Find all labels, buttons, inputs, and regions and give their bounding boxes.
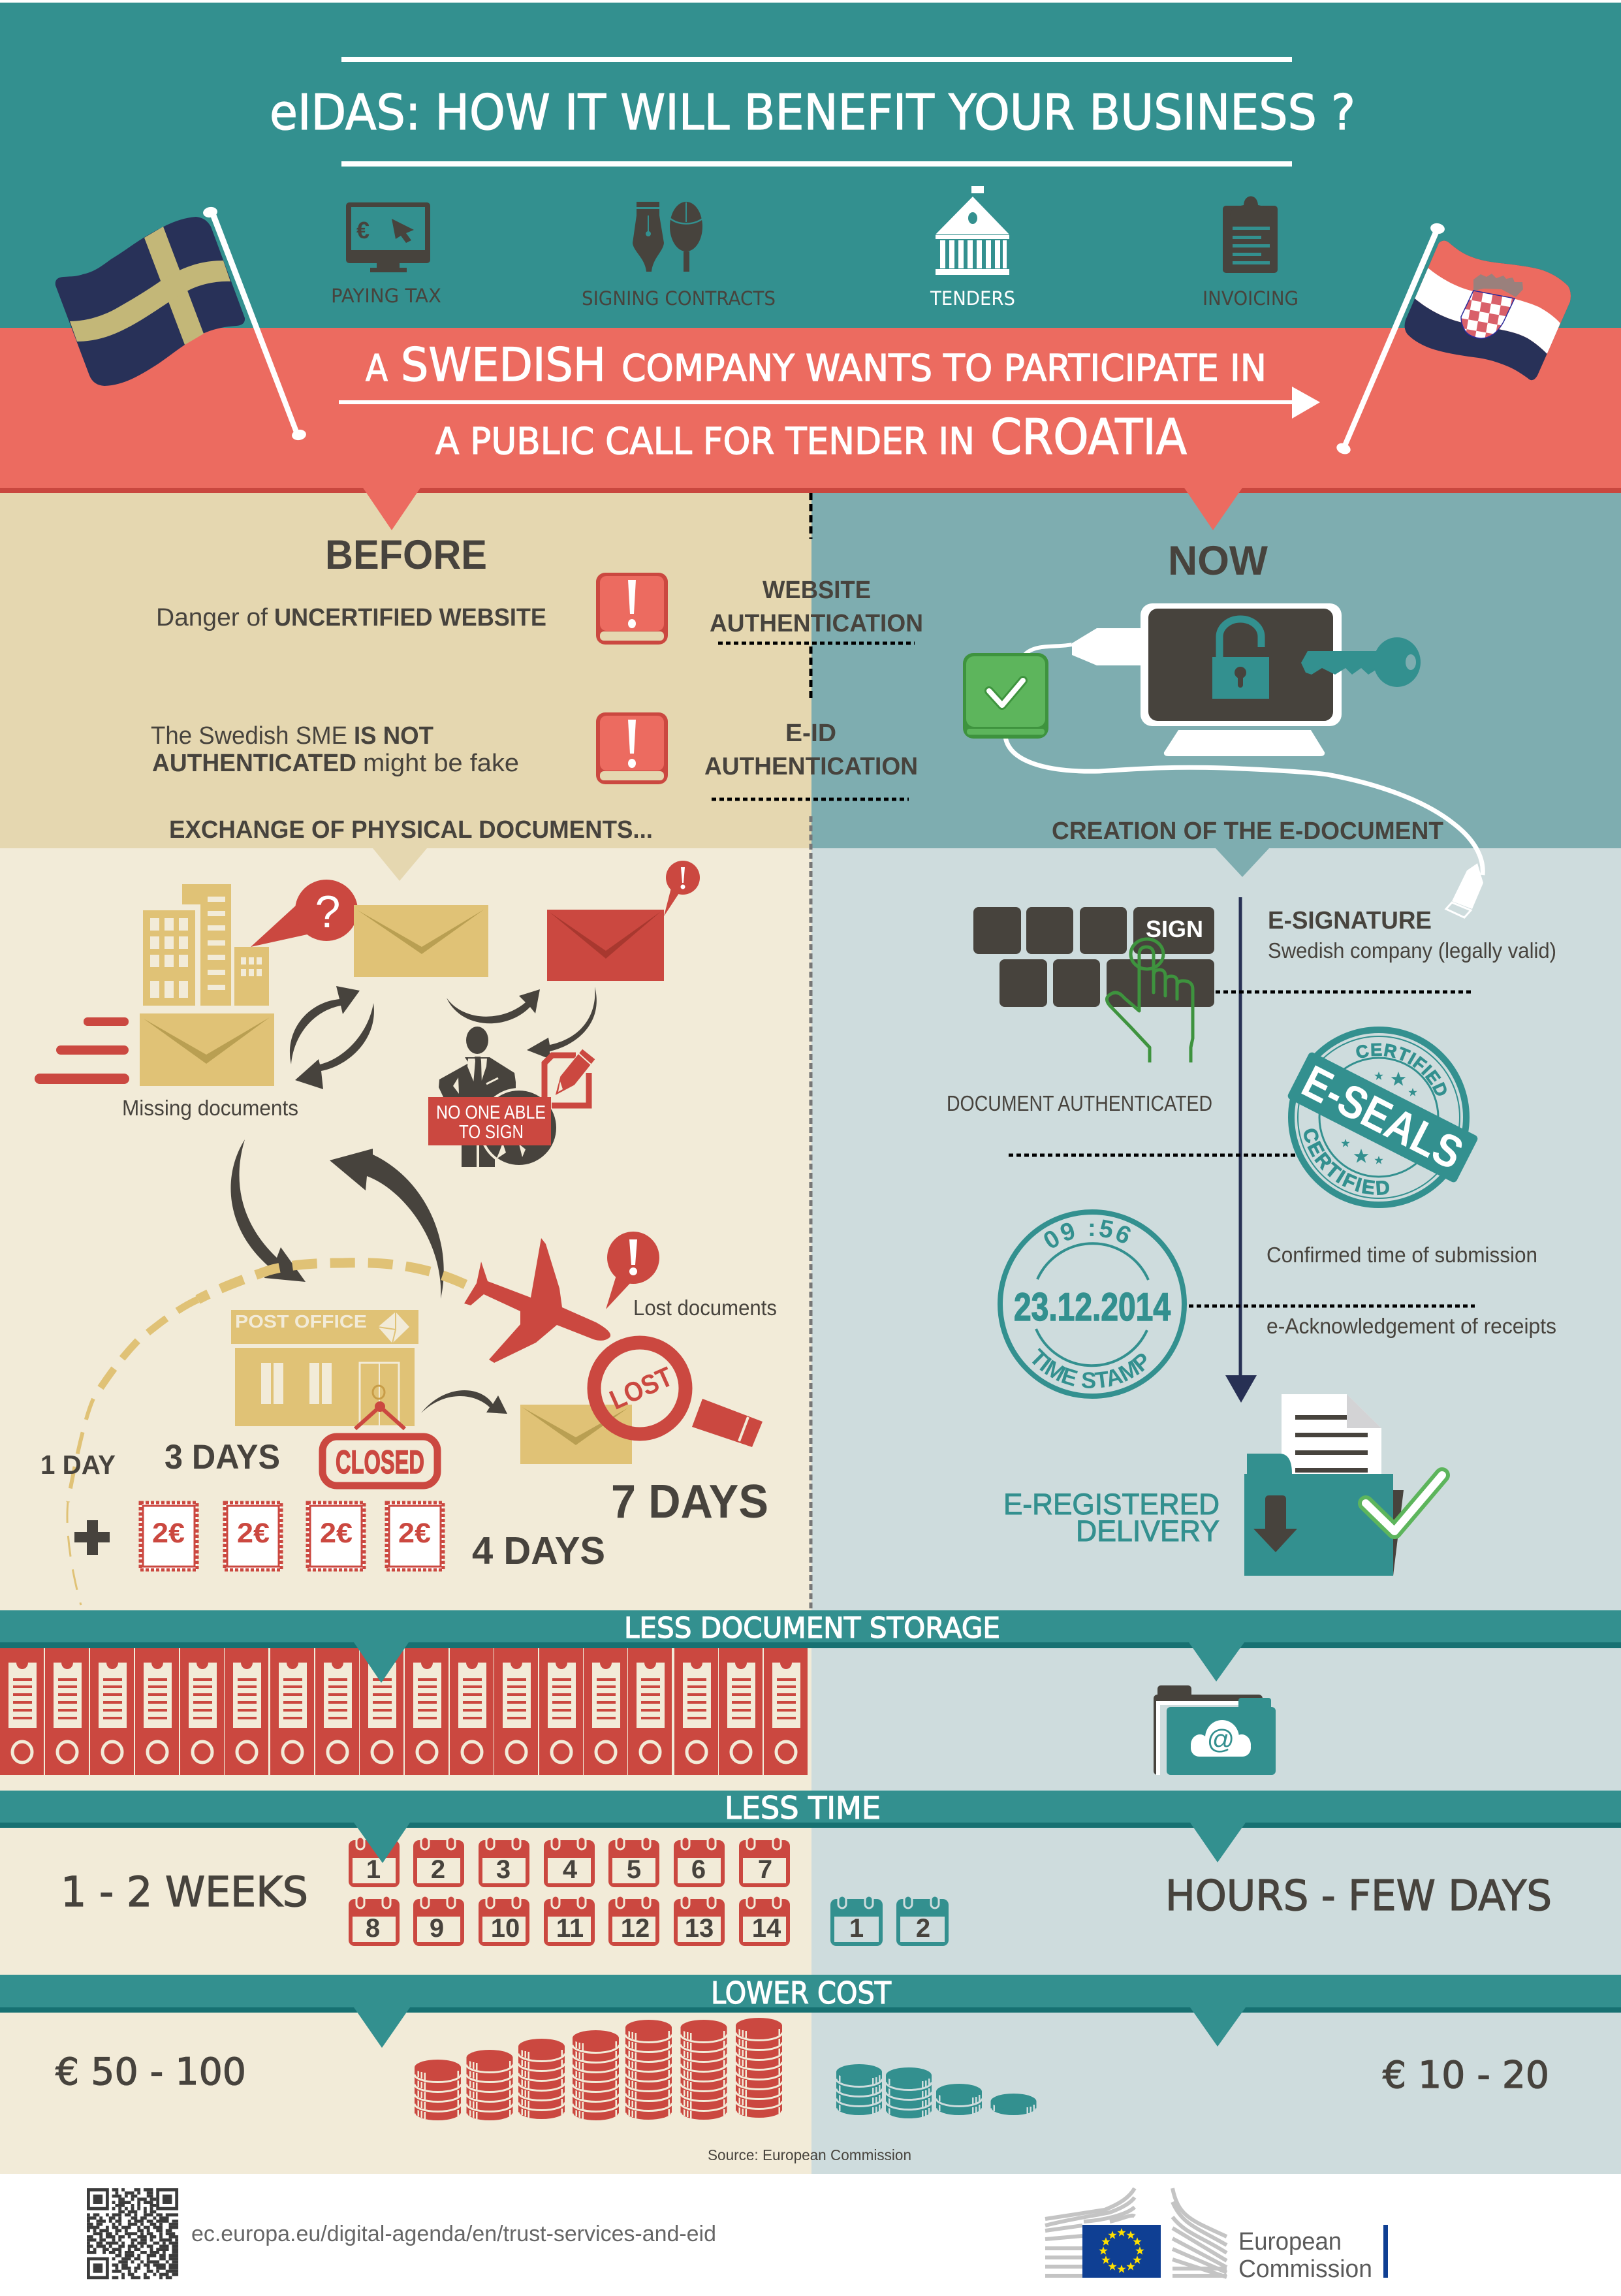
icon: Croatian flag bbox=[1336, 223, 1571, 454]
icon: time stamp bbox=[998, 1209, 1187, 1399]
logo: European Commission: Commission bbox=[1238, 2256, 1372, 2283]
icon: cloud folder: @ bbox=[1207, 1724, 1235, 1755]
panel: before top bbox=[0, 493, 811, 848]
label: no one able to sign: TO SIGN bbox=[459, 1122, 524, 1143]
panel: before lower bbox=[0, 848, 811, 2174]
center dashed divider bbox=[810, 493, 812, 1610]
label: website authentication: WEBSITE bbox=[763, 577, 871, 604]
label: 7 days: 7 DAYS bbox=[611, 1476, 768, 1528]
calendars: 14 days: 6 bbox=[691, 1855, 706, 1884]
banner headline line 2: A PUBLIC CALL FOR TENDER IN bbox=[435, 421, 975, 463]
band: less document storage: LESS DOCUMENT STORAGE bbox=[624, 1612, 1000, 1645]
text: document authenticated: DOCUMENT AUTHENTICATED bbox=[947, 1091, 1212, 1115]
heading: now: NOW bbox=[1168, 538, 1268, 584]
icon: registered delivery folder bbox=[1244, 1394, 1442, 1576]
text: SME not authenticated: AUTHENTICATED bbox=[152, 750, 356, 777]
callout arrow: sand pointer bbox=[373, 848, 427, 881]
icon: magnifier LOST bbox=[594, 1343, 763, 1447]
banner headline line 2 bbox=[435, 408, 1187, 466]
text: SME not authenticated: IS NOT bbox=[354, 722, 433, 750]
label: no one able to sign bbox=[428, 1097, 551, 1145]
icon: magnifier LOST: LOST bbox=[605, 1361, 678, 1415]
band: lower cost: LOWER COST bbox=[711, 1975, 892, 2011]
icon: question bubble bbox=[251, 880, 358, 947]
icon: e-seals stamp: E-SEALS bbox=[1295, 1055, 1471, 1179]
icon: closed sign: CLOSED bbox=[336, 1444, 424, 1480]
text: 1-2 weeks: 1 - 2 WEEKS bbox=[61, 1868, 308, 1916]
icon: e-seals stamp: CERTIFIED bbox=[1356, 1043, 1447, 1096]
icon: postage stamps: 2€ bbox=[398, 1518, 431, 1549]
calendars: 14 days: 5 bbox=[627, 1855, 641, 1884]
text: source: Source: European Commission bbox=[708, 2146, 911, 2163]
heading: creation of the e-document: CREATION OF THE E-DOCUMENT bbox=[1052, 818, 1443, 845]
arrow: Sweden to Croatia bbox=[339, 387, 1320, 419]
text: uncertified website: Danger of bbox=[156, 604, 268, 631]
icon: Swedish flag bbox=[55, 206, 307, 441]
heading: before: BEFORE bbox=[325, 532, 487, 578]
title: eIDAS: HOW IT WILL BENEFIT YOUR BUSINESS ? bbox=[270, 84, 1355, 141]
title rule top bbox=[341, 57, 1292, 62]
panel: now lower bbox=[811, 848, 1621, 2174]
icon: plus bbox=[74, 1520, 110, 1555]
banner headline line 2: CROATIA bbox=[990, 408, 1187, 466]
calendars: 14 days: 11 bbox=[556, 1914, 584, 1943]
calendars: 14 days: 10 bbox=[491, 1914, 520, 1943]
icon: office buildings bbox=[143, 884, 269, 1006]
banner headline line 1: SWEDISH bbox=[401, 338, 606, 392]
text: url: ec.europa.eu/digital-agenda/en/trust-services-and-eid bbox=[191, 2222, 716, 2246]
calendars: 14 days: 1 bbox=[366, 1855, 381, 1884]
arrow: big curve down bbox=[230, 1140, 306, 1282]
label: invoicing: INVOICING bbox=[1203, 287, 1298, 310]
band: less time bbox=[0, 1791, 1621, 1863]
text: e-acknowledgement: e-Acknowledgement of receipts bbox=[1267, 1314, 1556, 1338]
icon: green check token bbox=[963, 653, 1048, 739]
panel: now top bbox=[811, 493, 1621, 848]
calendars: 14 days bbox=[349, 1837, 790, 1946]
icon: post office bbox=[231, 1310, 418, 1426]
header panel: teal bbox=[0, 3, 1621, 328]
arrow: process timeline bbox=[1225, 897, 1257, 1403]
calendars: 14 days: 8 bbox=[366, 1914, 380, 1943]
calendars: 14 days: 4 bbox=[563, 1855, 578, 1884]
icon: lost envelope bbox=[520, 1405, 632, 1464]
label: e-ID authentication: AUTHENTICATION bbox=[704, 753, 918, 780]
calendars: 2 days: 2 bbox=[916, 1914, 930, 1943]
icon: document with pencil bbox=[544, 1049, 595, 1106]
calendars: 14 days: 9 bbox=[430, 1914, 444, 1943]
heading: exchange of physical documents: EXCHANGE OF PHYSICAL DOCUMENTS... bbox=[169, 816, 653, 844]
label: 3 days: 3 DAYS bbox=[165, 1438, 280, 1476]
band: less time: LESS TIME bbox=[725, 1791, 881, 1826]
icon: e-seals stamp bbox=[1287, 1027, 1478, 1208]
logo: European Commission bbox=[1045, 2188, 1388, 2283]
text: e-signature: Swedish company (legally valid) bbox=[1268, 938, 1556, 963]
text: uncertified website bbox=[156, 604, 546, 631]
icon: USB cable bbox=[1005, 645, 1483, 917]
label: signing contracts: SIGNING CONTRACTS bbox=[582, 287, 776, 310]
text: cost before: € 50 - 100 bbox=[55, 2050, 246, 2094]
icon: cloud folder bbox=[1154, 1685, 1276, 1775]
text: cost now: € 10 - 20 bbox=[1383, 2054, 1549, 2097]
banner headline line 1: A bbox=[366, 347, 388, 390]
text: hours - few days: HOURS - FEW DAYS bbox=[1165, 1872, 1552, 1921]
icon: exclamation bubble bbox=[606, 1232, 659, 1309]
icon: keyboard with SIGN key: SIGN bbox=[1146, 916, 1203, 942]
text: e-signature bbox=[1268, 907, 1556, 963]
label: no one able to sign: NO ONE ABLE bbox=[436, 1102, 546, 1123]
icon: postage stamps: 2€ bbox=[320, 1518, 353, 1549]
icon: closed sign bbox=[323, 1401, 437, 1486]
QR code bbox=[87, 2188, 178, 2279]
chart: red coin stacks bbox=[415, 2018, 782, 2121]
icon: alert 1 bbox=[596, 573, 668, 645]
icon: e-seals stamp: CERTIFIED bbox=[1304, 1128, 1389, 1195]
icon: red envelope bbox=[547, 861, 700, 981]
label: 4 days: 4 DAYS bbox=[472, 1529, 605, 1572]
flight path: dashed arc bbox=[67, 1263, 465, 1605]
arrows: circular between documents bbox=[290, 986, 597, 1089]
icon: question bubble: ? bbox=[315, 886, 340, 937]
icon: time stamp: 09 :56 bbox=[1045, 1220, 1131, 1248]
icon: post office: POST OFFICE bbox=[235, 1311, 367, 1331]
callout arrows: coral pointers bbox=[363, 488, 1242, 530]
icon: airplane bbox=[464, 1238, 610, 1363]
calendars: 14 days: 14 bbox=[752, 1914, 781, 1943]
band: less document storage bbox=[0, 1610, 1621, 1683]
icon: gold envelope bbox=[354, 905, 488, 977]
icon: speed lines bbox=[35, 1017, 129, 1084]
label: e-registered delivery: DELIVERY bbox=[1076, 1514, 1220, 1548]
icon: moving envelope bbox=[140, 1013, 274, 1086]
icon: paying tax monitor: € bbox=[356, 217, 370, 244]
icon: paying tax monitor bbox=[346, 202, 430, 272]
icon: invoicing clipboard bbox=[1223, 196, 1278, 273]
icon: postage stamps: 2€ bbox=[237, 1518, 270, 1549]
text: uncertified website: UNCERTIFIED WEBSITE bbox=[274, 604, 546, 631]
icon: time stamp: 23.12.2014 bbox=[1014, 1285, 1171, 1329]
calendars: 14 days: 13 bbox=[685, 1914, 714, 1943]
icon: monitor with lock and key bbox=[1072, 603, 1421, 756]
chart: binders (document storage) bbox=[0, 1648, 808, 1775]
calendars: 14 days: 3 bbox=[496, 1855, 511, 1884]
chart: teal coin stacks bbox=[836, 2064, 1037, 2120]
banner panel: coral bbox=[0, 328, 1621, 493]
label: e-registered delivery: E-REGISTERED bbox=[1003, 1488, 1220, 1521]
calendars: 2 days bbox=[830, 1896, 949, 1946]
label: e-ID authentication: E-ID bbox=[785, 720, 836, 747]
calendars: 14 days: 2 bbox=[431, 1855, 445, 1884]
label: 1 day: 1 DAY bbox=[40, 1450, 116, 1480]
label: paying tax: PAYING TAX bbox=[331, 285, 441, 307]
label: website authentication bbox=[710, 577, 923, 637]
title rule bottom bbox=[341, 161, 1292, 167]
icon: businessman bbox=[439, 1027, 558, 1167]
calendars: 14 days: 12 bbox=[621, 1914, 650, 1943]
text: e-signature: E-SIGNATURE bbox=[1268, 907, 1432, 934]
label: tenders: TENDERS bbox=[930, 287, 1015, 310]
icon: alert 2 bbox=[596, 712, 668, 784]
text: missing documents: Missing documents bbox=[122, 1096, 298, 1120]
icon: signing contracts pen and mouse bbox=[633, 202, 702, 272]
text: SME not authenticated bbox=[151, 722, 519, 777]
arrow: post office to envelope bbox=[421, 1390, 507, 1414]
icon: postage stamps bbox=[140, 1503, 443, 1570]
band: lower cost bbox=[0, 1975, 1621, 2048]
text: SME not authenticated: The Swedish SME bbox=[151, 722, 347, 750]
callout arrow: teal pointer bbox=[1216, 848, 1269, 877]
banner headline line 1 bbox=[366, 338, 1267, 392]
calendars: 14 days: 7 bbox=[758, 1855, 772, 1884]
text: SME not authenticated: might be fake bbox=[363, 750, 519, 777]
icon: hand pressing key bbox=[1107, 939, 1193, 1062]
label: e-registered delivery bbox=[1003, 1488, 1220, 1548]
label: website authentication: AUTHENTICATION bbox=[710, 610, 923, 637]
logo: European Commission: European bbox=[1238, 2228, 1342, 2256]
icon: tenders building bbox=[936, 186, 1009, 275]
label: e-ID authentication bbox=[704, 720, 918, 780]
icon: keyboard with SIGN key bbox=[973, 907, 1214, 1007]
text: lost documents: Lost documents bbox=[633, 1296, 777, 1320]
calendars: 2 days: 1 bbox=[849, 1914, 864, 1943]
arrow: big curve up bbox=[330, 1149, 444, 1299]
icon: time stamp: TIME STAMP bbox=[1032, 1348, 1146, 1388]
icon: postage stamps: 2€ bbox=[152, 1518, 185, 1549]
banner headline line 1: COMPANY WANTS TO PARTICIPATE IN bbox=[622, 347, 1267, 390]
text: confirmed time: Confirmed time of submission bbox=[1267, 1243, 1537, 1267]
